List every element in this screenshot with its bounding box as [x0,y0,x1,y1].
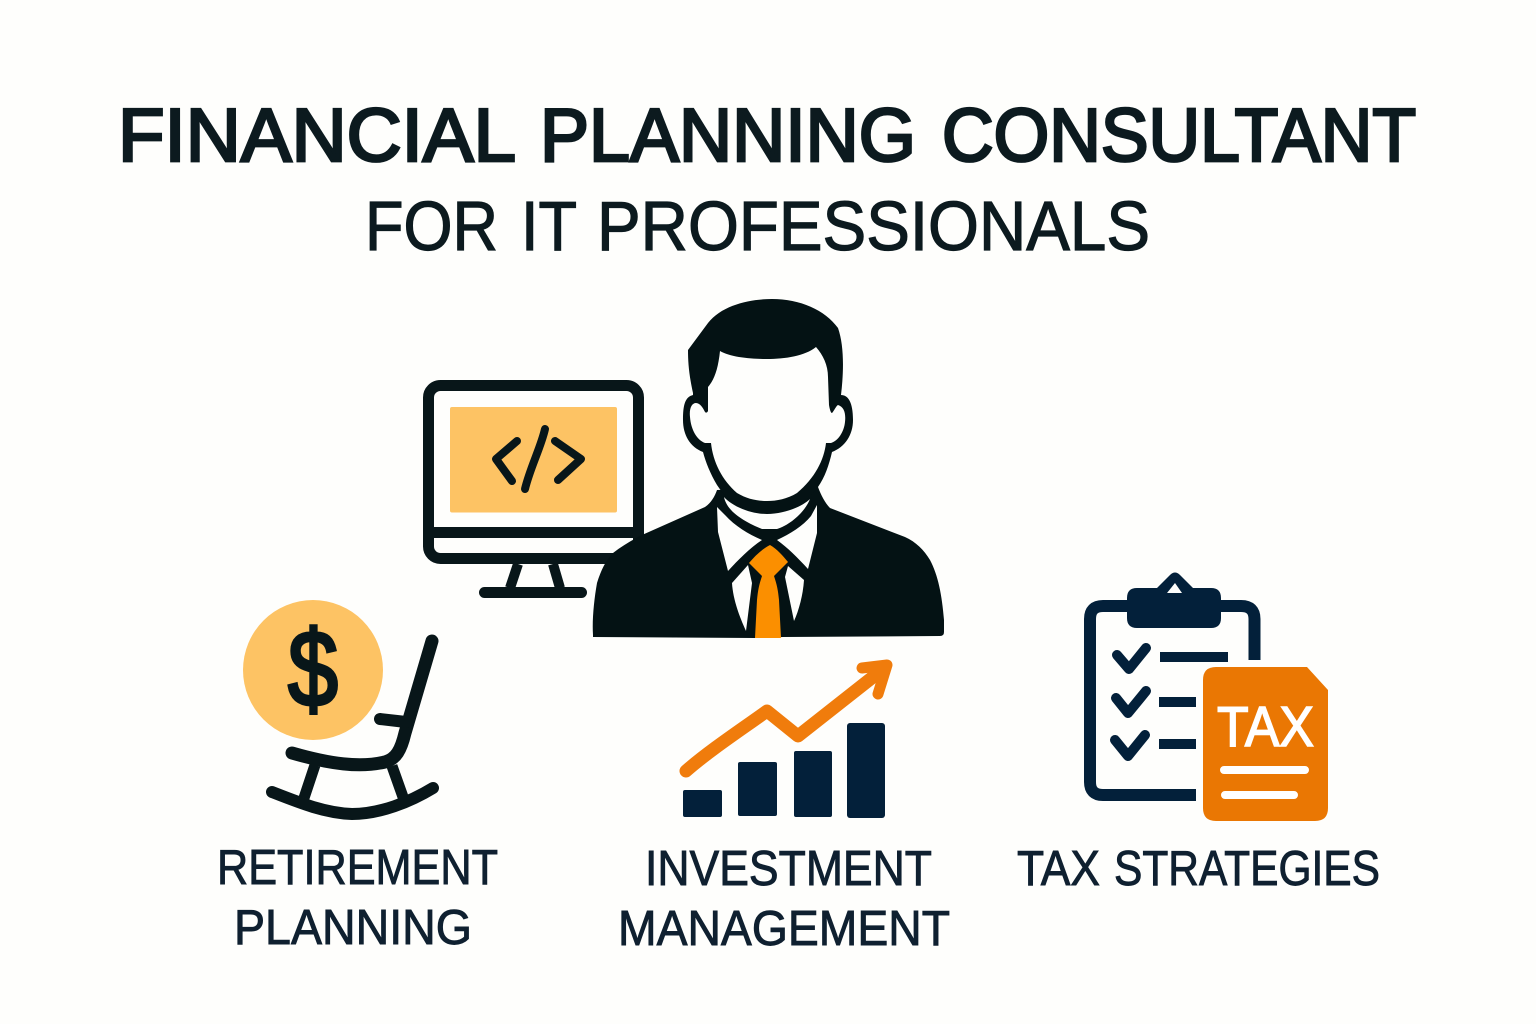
icon: retirement rocking chair and coin: $ [288,608,338,729]
title [118,93,1416,265]
label: investment management: MANAGEMENT [618,902,950,956]
title: PROFESSIONALS [597,187,1150,265]
title: CONSULTANT [942,93,1416,177]
title: FINANCIAL [118,93,516,177]
shirt lower left [732,565,752,631]
tie [749,545,788,638]
label: retirement planning [217,841,498,955]
face [690,347,845,501]
title: PLANNING [540,93,916,177]
checklist [1115,648,1146,756]
icon: tax clipboard [1090,572,1328,821]
shirt lower right [785,566,804,621]
icon: tax clipboard: TAX [1217,695,1314,759]
title: IT [521,187,577,265]
label: tax strategies [1017,842,1380,896]
label: retirement planning: PLANNING [234,901,472,955]
label: tax strategies: TAX [1017,842,1100,896]
neck band [724,497,810,529]
suit [593,487,944,638]
shirt left collar [717,507,762,571]
label: tax strategies: STRATEGIES [1114,842,1380,896]
clipboard board [1090,606,1254,795]
label: investment management [618,842,950,956]
icon: computer monitor [428,386,639,592]
label: retirement planning: RETIREMENT [217,841,498,895]
tax document [1203,667,1328,821]
title: FOR [365,187,498,265]
head silhouette [683,299,853,513]
label: investment management: INVESTMENT [645,842,932,896]
icon: consultant [593,299,944,638]
icon: retirement rocking chair and coin [243,600,433,814]
clip [1127,572,1221,628]
icon: investment growth chart [683,665,887,818]
shirt right collar [777,505,817,569]
